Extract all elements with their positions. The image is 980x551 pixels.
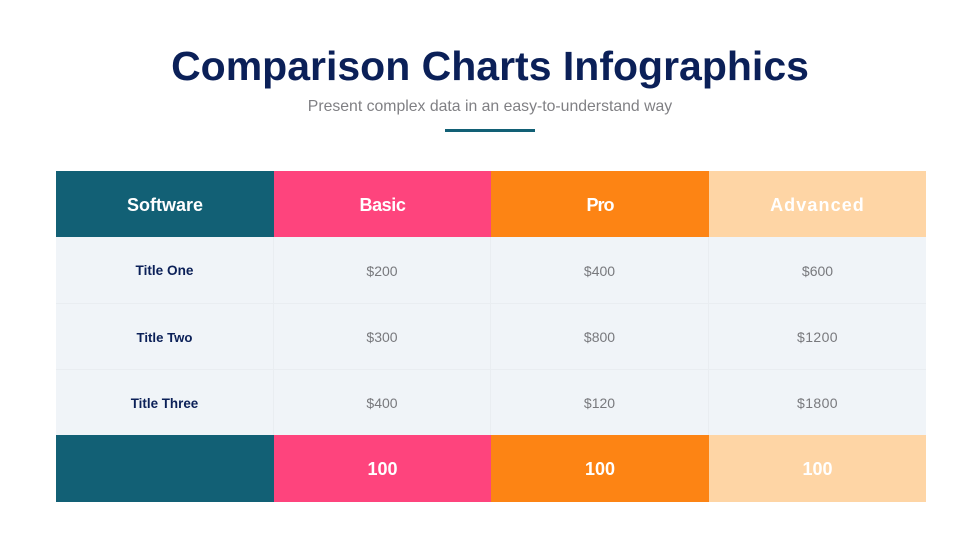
row: Title Two: $300 xyxy=(366,329,398,345)
header: Basic xyxy=(274,171,491,237)
header: Advanced xyxy=(709,171,926,237)
footer: Basic total: 100 xyxy=(367,458,398,478)
row: Title Two: $1200 xyxy=(797,329,838,345)
title: Comparison Charts Infographics xyxy=(171,43,809,89)
row: Title Two: $800 xyxy=(584,329,615,345)
row: Title One: Title One xyxy=(136,263,193,278)
row: Title Three: $1800 xyxy=(797,395,838,411)
row: Title One: $200 xyxy=(366,262,398,278)
row: Title Three: $120 xyxy=(584,395,615,411)
subtitle: Present complex data in an easy-to-understand way xyxy=(308,98,672,115)
row: Title Three: Title Three xyxy=(131,396,198,410)
row: Title One: $400 xyxy=(584,262,615,278)
row: Title One xyxy=(136,262,833,278)
footer: blank cell xyxy=(56,435,274,502)
row: Title One: $600 xyxy=(802,262,833,278)
header: Advanced: Advanced xyxy=(770,194,865,214)
header: Software xyxy=(56,171,274,237)
header: Pro xyxy=(491,171,709,237)
header: Basic: Basic xyxy=(359,194,406,214)
footer: Advanced total: 100 xyxy=(802,458,833,478)
comparison table xyxy=(56,171,926,502)
row: Title Three xyxy=(130,395,838,411)
footer: Basic total xyxy=(274,435,491,502)
footer: Pro total xyxy=(491,435,709,502)
footer: Advanced total xyxy=(709,435,926,502)
row: Title Three: $400 xyxy=(366,395,398,411)
header: Pro: Pro xyxy=(586,194,614,214)
header: Software: Software xyxy=(127,194,203,214)
row: Title Two: Title Two xyxy=(137,330,192,344)
row: Title Two xyxy=(136,329,838,345)
title underline xyxy=(445,129,535,132)
footer: Pro total: 100 xyxy=(585,458,615,478)
